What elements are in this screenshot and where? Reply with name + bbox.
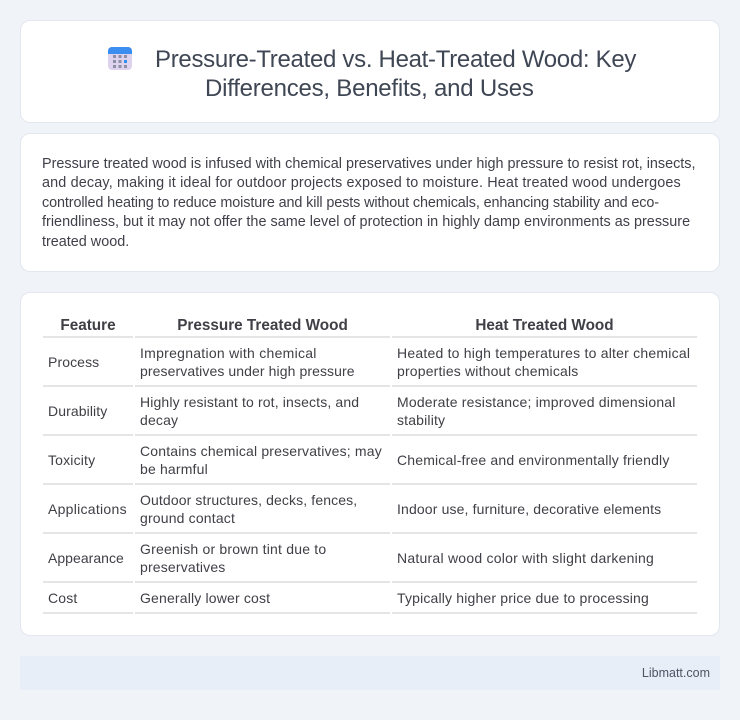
title: Differences, Benefits, and Uses (205, 75, 534, 102)
footer credit: Libmatt.com (642, 666, 710, 680)
intro paragraph: treated wood. (42, 234, 129, 250)
table (43, 317, 697, 614)
title: Pressure-Treated vs. Heat-Treated Wood: Key (155, 46, 636, 73)
row: durability: Durability (48, 403, 107, 419)
row: process: preservatives under high pressure (140, 363, 355, 379)
row: appearance: Appearance (48, 550, 124, 566)
intro paragraph (42, 156, 695, 250)
row: toxicity (48, 443, 670, 477)
row: toxicity: Contains chemical preservatives; may (140, 443, 382, 459)
row: process: Impregnation with chemical (140, 345, 317, 361)
intro paragraph: friendliness, but it may not offer the same level of protection in highly damp environments as pressure (42, 214, 690, 230)
row: appearance: preservatives (140, 559, 225, 575)
table header (60, 317, 614, 334)
row: process: Heated to high temperatures to alter chemical (397, 345, 690, 361)
row: cost (48, 590, 649, 606)
row: toxicity: be harmful (140, 461, 208, 477)
intro text panel (20, 133, 720, 272)
row: durability: decay (140, 412, 178, 428)
row: process (48, 345, 690, 379)
row: durability: Highly resistant to rot, insects, and (140, 394, 359, 410)
row: appearance: Greenish or brown tint due to (140, 541, 326, 557)
row: cost: Cost (48, 590, 77, 606)
row: cost: Generally lower cost (140, 590, 270, 606)
intro paragraph: and decay, making it ideal for outdoor projects exposed to moisture. Heat treated wood undergoes (42, 175, 681, 191)
intro paragraph: Pressure treated wood is infused with chemical preservatives under high pressure to resist rot, insects, (42, 156, 695, 172)
row: cost: Typically higher price due to processing (397, 590, 649, 606)
row: appearance (48, 541, 654, 575)
row: process: Process (48, 354, 99, 370)
row: durability: stability (397, 412, 445, 428)
row: process: properties without chemicals (397, 363, 578, 379)
row: toxicity: Toxicity (48, 452, 95, 468)
row: applications: Outdoor structures, decks, fences, (140, 492, 357, 508)
footer (20, 656, 720, 690)
row: appearance: Natural wood color with slight darkening (397, 550, 654, 566)
row: applications: Applications (48, 501, 127, 517)
title (155, 46, 636, 102)
table header: Feature (60, 317, 116, 334)
intro paragraph: controlled heating to reduce moisture and kill pests without chemicals, enhancing stability and eco- (42, 195, 659, 211)
icon: calendar (108, 47, 132, 70)
table header: Pressure Treated Wood (177, 317, 348, 334)
row: durability (48, 394, 676, 428)
row: applications: Indoor use, furniture, decorative elements (397, 501, 661, 517)
row: durability: Moderate resistance; improved dimensional (397, 394, 676, 410)
row: toxicity: Chemical-free and environmentally friendly (397, 452, 669, 468)
row: applications (48, 492, 661, 526)
table header: Heat Treated Wood (475, 317, 614, 334)
comparison table panel (20, 292, 720, 636)
row: applications: ground contact (140, 510, 235, 526)
header panel (20, 20, 720, 123)
